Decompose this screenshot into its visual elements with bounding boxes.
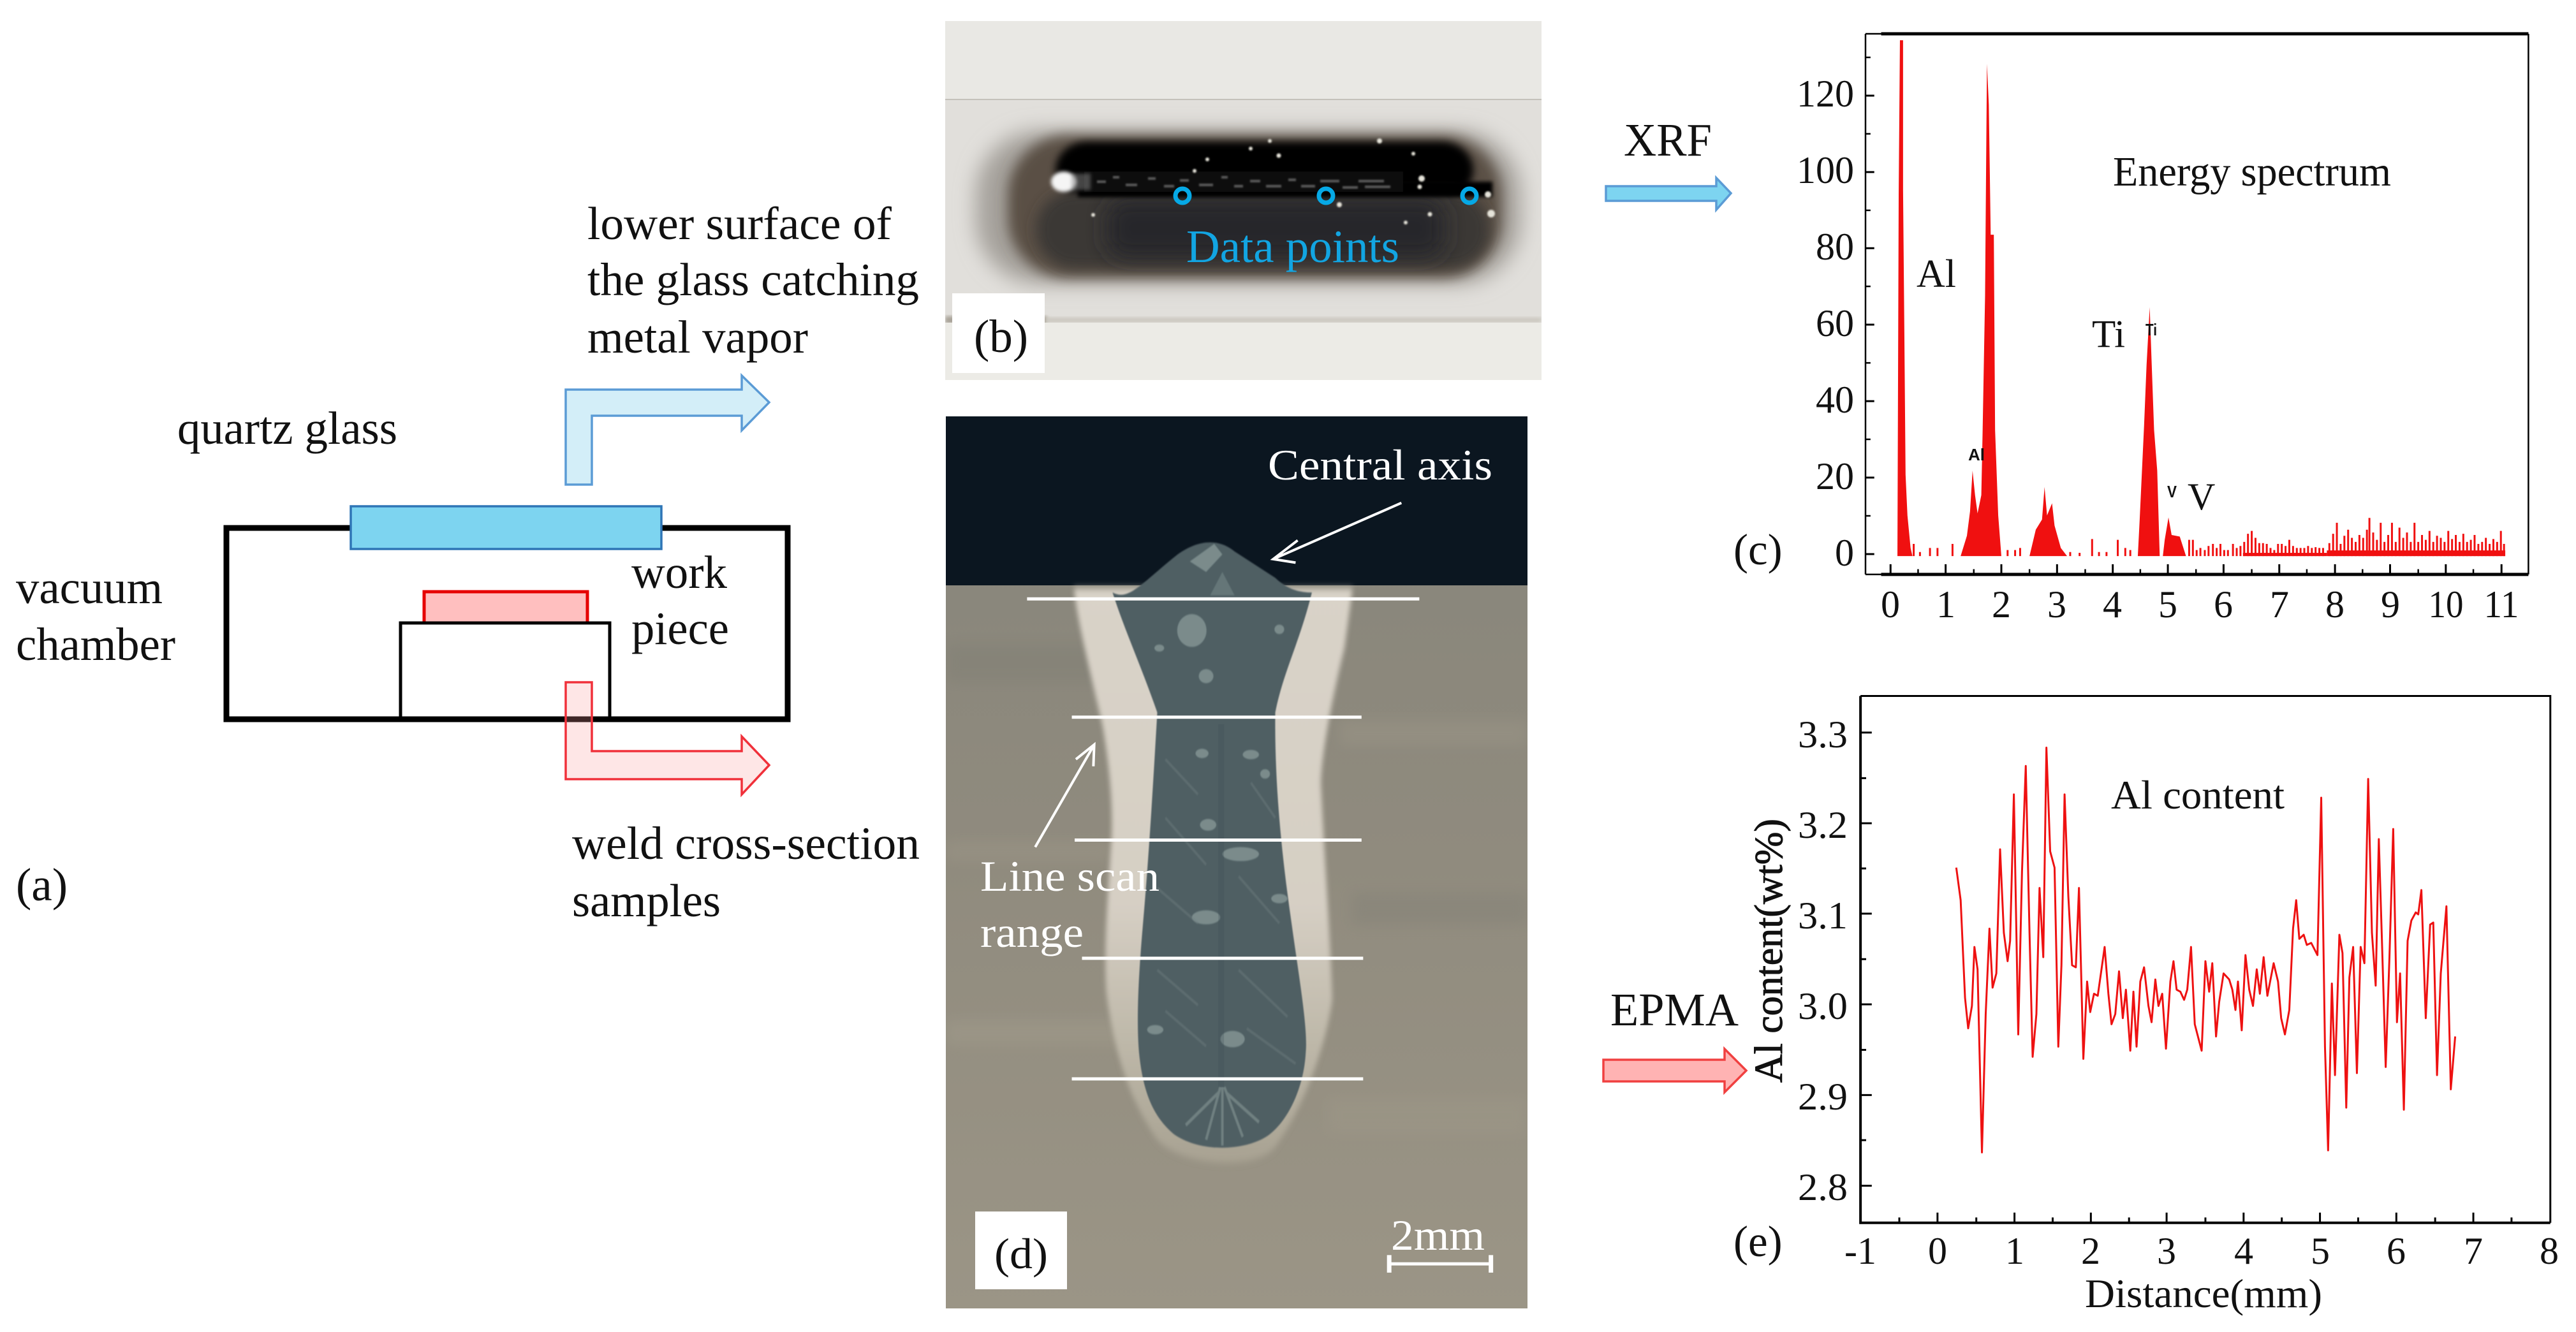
chart x-axis labels: 1 <box>2005 1230 2024 1272</box>
label: (e): (e) <box>1733 1217 1783 1266</box>
panel c: energy spectrum chart <box>1733 34 2528 626</box>
spectrum x-axis labels: 8 <box>2325 583 2344 626</box>
label: central axis: Central axis <box>1268 441 1492 489</box>
chart y-axis labels: 3.2 <box>1798 804 1848 846</box>
chart y-axis labels: 3.3 <box>1798 714 1848 756</box>
label: weld cross-section samples: weld cross-section <box>572 817 920 869</box>
label: EPMA: EPMA <box>1610 984 1739 1036</box>
label: weld cross-section samples <box>572 817 920 926</box>
spectrum y-axis labels: 100 <box>1797 149 1854 191</box>
chart x-axis labels: 7 <box>2464 1230 2483 1272</box>
chart y-axis labels: 2.8 <box>1798 1166 1848 1208</box>
spectrum y-axis labels <box>1797 73 1854 574</box>
label: data points: Data points <box>1186 221 1399 272</box>
chart x-axis labels: 0 <box>1928 1230 1947 1272</box>
quartz glass <box>351 506 661 549</box>
work piece <box>424 592 587 623</box>
chart y-axis labels: 3.1 <box>1798 895 1848 937</box>
small peak tags: V <box>2167 482 2177 501</box>
small peak tags: Al <box>1968 445 1985 464</box>
spectrum x-axis labels: 6 <box>2214 583 2233 626</box>
label: energy spectrum: Energy spectrum <box>2113 149 2391 195</box>
label: 2mm: 2mm <box>1391 1211 1485 1259</box>
label box: (b) <box>952 293 1045 373</box>
label: lower surface text <box>587 198 919 363</box>
panel e: Al content chart <box>1733 696 2559 1316</box>
spectrum noise bars <box>1914 518 2504 556</box>
dark deposit <box>976 131 1521 284</box>
spectrum y-axis labels: 120 <box>1797 73 1854 115</box>
label: vacuum chamber <box>16 562 175 670</box>
chart axes <box>1860 696 2550 1223</box>
spectrum y-axis labels: 60 <box>1816 302 1854 344</box>
label: Al: Al <box>1917 252 1956 296</box>
label: vacuum chamber: chamber <box>16 618 175 670</box>
chart x-axis labels: 4 <box>2234 1230 2253 1272</box>
label: line scan range: Line scan <box>980 852 1159 900</box>
spectrum y-axis labels: 80 <box>1816 226 1854 268</box>
arrow: XRF <box>1606 178 1731 210</box>
white specks <box>1091 138 1495 224</box>
heat-affected zone <box>1074 589 1353 1163</box>
panel d: weld cross-section micrograph <box>946 416 1527 1308</box>
chart y-axis labels <box>1798 714 1848 1208</box>
weld metal fusion zone <box>1112 543 1312 1148</box>
spectrum x-axis labels: 2 <box>1992 583 2011 626</box>
label box: (d) <box>975 1211 1067 1289</box>
label box: (b): (b) <box>974 311 1028 362</box>
chart x-axis labels: 3 <box>2157 1230 2176 1272</box>
arrow: line scan range <box>1035 745 1094 847</box>
scale bar <box>1389 1255 1491 1273</box>
spectrum axes <box>1866 34 2528 575</box>
chart x-axis labels: 8 <box>2540 1230 2559 1272</box>
spectrum y-axis labels: 20 <box>1816 455 1854 497</box>
arrow: red to weld samples <box>566 682 769 794</box>
y-axis title: Al content(wt%) <box>1748 819 1791 1083</box>
label: work piece: piece <box>631 603 729 654</box>
panel a: vacuum chamber schematic <box>16 198 920 926</box>
spectrum peaks <box>1897 40 2505 556</box>
data point markers <box>1175 189 1476 203</box>
base metal banding <box>946 644 1527 1135</box>
chart x-axis labels: 5 <box>2311 1230 2330 1272</box>
chart y-axis labels: 2.9 <box>1798 1076 1848 1118</box>
panel b: photo of glass with metal vapor deposit <box>945 21 1542 380</box>
label: work piece: work <box>631 546 727 598</box>
chart x-axis labels: 6 <box>2387 1230 2406 1272</box>
arrow: EPMA <box>1603 1049 1746 1092</box>
spectrum x-axis labels: 3 <box>2047 583 2066 626</box>
x-axis title: Distance(mm) <box>2085 1271 2322 1316</box>
spectrum x-axis labels: 7 <box>2270 583 2289 626</box>
label: line scan range <box>981 862 1159 956</box>
spectrum x-axis labels: 11 <box>2484 583 2519 626</box>
spectrum x-axis labels: 5 <box>2158 583 2177 626</box>
chart x-axis labels: 2 <box>2081 1230 2100 1272</box>
chart x-axis labels <box>1844 1230 2559 1272</box>
Al content line <box>1956 748 2455 1152</box>
arrow: central axis <box>1273 503 1401 562</box>
weld bead trace <box>1051 172 1403 192</box>
chart x-axis labels: -1 <box>1844 1230 1876 1272</box>
label: quartz glass: quartz glass <box>177 402 397 454</box>
spectrum x-axis labels: 10 <box>2429 583 2463 626</box>
spectrum x-axis labels: 9 <box>2381 583 2400 626</box>
chart y-axis labels: 3.0 <box>1798 985 1848 1027</box>
vacuum chamber outline <box>226 528 788 719</box>
label: work piece <box>631 546 729 654</box>
spectrum x-axis labels: 1 <box>1936 583 1955 626</box>
weld texture <box>1147 544 1295 1146</box>
label: line scan range: range <box>980 908 1084 956</box>
dark upper background <box>946 416 1527 585</box>
label: vacuum chamber: vacuum <box>16 562 163 613</box>
label: (a): (a) <box>16 859 68 911</box>
label box: (d): (d) <box>994 1229 1048 1278</box>
label: XRF: XRF <box>1624 114 1712 166</box>
spectrum x-axis labels: 4 <box>2103 583 2122 626</box>
label: lower surface text: the glass catching <box>587 254 919 305</box>
spectrum y-axis labels: 0 <box>1835 532 1854 574</box>
label: V: V <box>2188 476 2215 518</box>
label: weld cross-section samples: samples <box>572 875 721 926</box>
spectrum x-axis labels <box>1881 583 2519 626</box>
label: Al content: Al content <box>2111 772 2285 817</box>
label: Ti: Ti <box>2092 313 2125 356</box>
stage <box>401 623 610 719</box>
arrow: blue to glass surface <box>566 376 769 485</box>
label: (c): (c) <box>1733 525 1783 574</box>
small peak tags <box>1968 320 2177 501</box>
label: lower surface text: metal vapor <box>587 311 808 363</box>
label: lower surface text: lower surface of <box>587 198 892 249</box>
spectrum y-axis labels: 40 <box>1816 379 1854 421</box>
small peak tags: Ti <box>2145 320 2157 339</box>
spectrum x-axis labels: 0 <box>1881 583 1900 626</box>
white scan lines <box>1027 599 1419 1079</box>
